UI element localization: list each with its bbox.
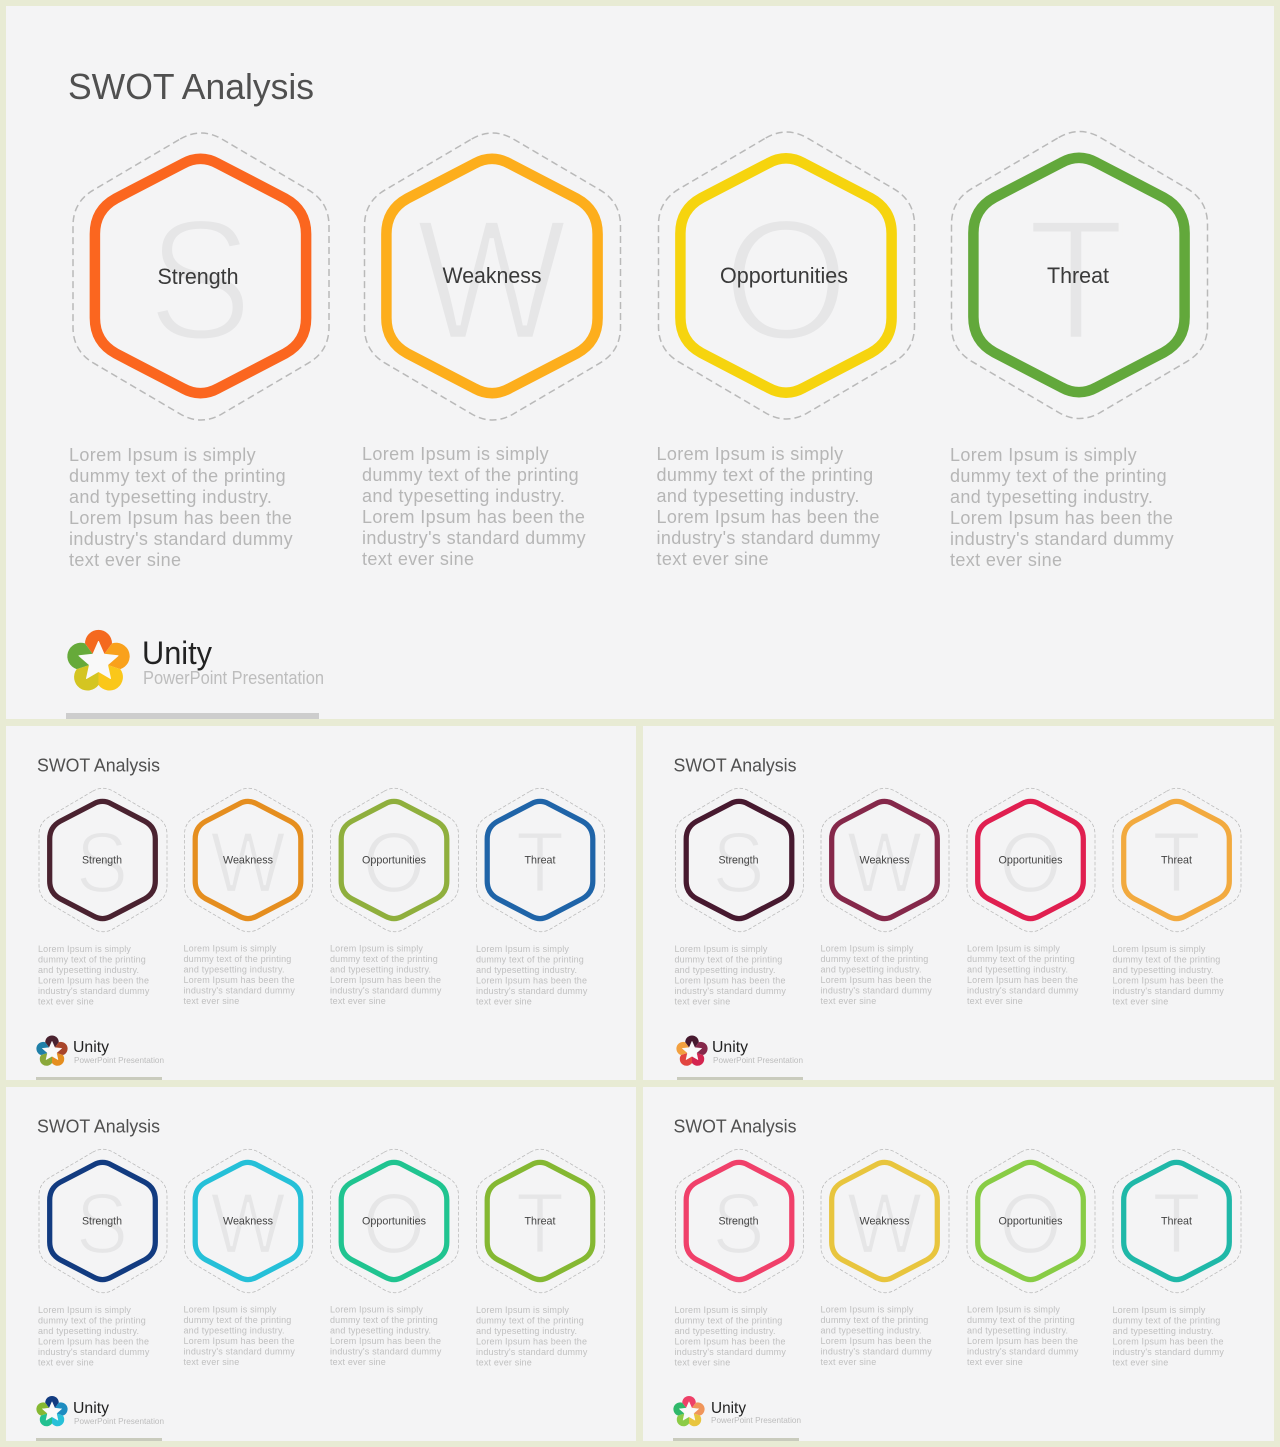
text block: Threat: Lorem Ipsum has been the <box>1112 1336 1224 1346</box>
hexagon: Threat <box>1113 1149 1241 1293</box>
panel: main SWOT slide <box>6 6 1274 719</box>
brand name: Unity <box>712 1039 748 1056</box>
hexagon: Strength <box>676 1149 804 1293</box>
title: SWOT Analysis <box>68 66 314 107</box>
panel: pink gold green teal variant <box>643 1087 1274 1441</box>
text block: Opportunities: text ever sine <box>967 1357 1023 1367</box>
text block: Strength: industry's standard dummy <box>69 529 293 549</box>
hexagon: Weakness <box>184 788 312 932</box>
hexagon: Weakness <box>184 1149 312 1293</box>
hexagon: Opportunities <box>967 788 1095 932</box>
text block: Opportunities: dummy text of the printing <box>656 465 873 485</box>
hexagon: Weakness: Weakness <box>860 1216 910 1228</box>
text block: Weakness: Lorem Ipsum is simply <box>820 944 914 954</box>
text block: Threat: Lorem Ipsum is simply <box>1112 944 1206 954</box>
text block: Threat: text ever sine <box>1112 996 1168 1006</box>
text block: Strength: dummy text of the printing <box>38 1316 146 1326</box>
hexagon: Opportunities: Opportunities <box>362 1216 426 1228</box>
panel: navy cyan teal lime variant <box>6 1087 636 1441</box>
brand subtitle: PowerPoint Presentation <box>74 1416 164 1426</box>
hexagon: Weakness: W <box>416 185 567 376</box>
hexagon: Opportunities: O <box>363 1175 425 1272</box>
hexagon: Threat: T <box>1152 814 1201 911</box>
hexagon: Strength: Strength <box>158 264 238 289</box>
text block: Threat: and typesetting industry. <box>1112 965 1214 975</box>
text block: Weakness: industry's standard dummy <box>184 1346 295 1356</box>
text block: Weakness: and typesetting industry. <box>184 1326 285 1336</box>
text block: Weakness: text ever sine <box>362 549 474 569</box>
text block: Strength: text ever sine <box>69 550 181 570</box>
text block: Threat: dummy text of the printing <box>476 954 584 964</box>
panel: maroon orange green blue variant <box>6 726 636 1080</box>
text block: Opportunities: and typesetting industry. <box>656 486 860 506</box>
text block: Threat: industry's standard dummy <box>1112 986 1224 996</box>
hexagon: Opportunities: O <box>999 814 1062 911</box>
text block: Opportunities: industry's standard dummy <box>330 986 442 996</box>
text block: Opportunities: text ever sine <box>330 996 386 1006</box>
hexagon: Strength: S <box>148 183 252 376</box>
text block: Weakness: dummy text of the printing <box>184 1315 291 1325</box>
text block: Opportunities: and typesetting industry. <box>330 1326 431 1336</box>
hexagon: Strength: Strength <box>718 1216 758 1228</box>
hexagon: Weakness <box>821 1149 949 1293</box>
text block: Opportunities: Lorem Ipsum is simply <box>656 444 844 464</box>
text block: Opportunities: text ever sine <box>330 1357 386 1367</box>
text block: Strength: Lorem Ipsum has been the <box>38 976 149 986</box>
text block: Threat: text ever sine <box>476 996 532 1006</box>
text block: Weakness: text ever sine <box>820 1357 876 1367</box>
hexagon: Threat: T <box>516 1175 564 1272</box>
text block: Strength: Lorem Ipsum has been the <box>674 976 786 986</box>
text block: Threat: text ever sine <box>950 550 1062 570</box>
title: SWOT Analysis <box>674 756 796 776</box>
brand subtitle: PowerPoint Presentation <box>713 1055 803 1065</box>
text block: Weakness: industry's standard dummy <box>820 986 932 996</box>
brand subtitle: PowerPoint Presentation <box>711 1415 801 1425</box>
text block: Weakness: Lorem Ipsum is simply <box>184 944 277 954</box>
text block: Strength: Lorem Ipsum is simply <box>674 944 768 954</box>
hexagon: Threat: Threat <box>524 854 556 866</box>
text block: Threat: Lorem Ipsum has been the <box>476 976 587 986</box>
text block: Opportunities: dummy text of the printing <box>330 1315 438 1325</box>
hexagon: Threat <box>1113 788 1241 932</box>
icon: Unity logo <box>35 1396 69 1429</box>
text block: Strength: Lorem Ipsum has been the <box>69 508 292 528</box>
text block: Opportunities: dummy text of the printing <box>330 954 438 964</box>
hexagon: Opportunities: Opportunities <box>362 854 426 866</box>
text block: Weakness: text ever sine <box>820 996 876 1006</box>
hexagon: Weakness: W <box>847 814 923 911</box>
text block: Weakness: and typesetting industry. <box>820 964 922 974</box>
text block: Weakness: dummy text of the printing <box>362 465 579 485</box>
text block: Strength: Lorem Ipsum is simply <box>69 445 256 465</box>
text block: Threat: and typesetting industry. <box>476 1326 577 1336</box>
hexagon: Opportunities: O <box>363 814 425 911</box>
text block: Threat: Lorem Ipsum is simply <box>1112 1305 1206 1315</box>
text block: Opportunities: industry's standard dummy <box>967 986 1079 996</box>
hexagon: Threat: T <box>1152 1175 1201 1272</box>
hexagon: Weakness: W <box>847 1175 923 1272</box>
hexagon: Threat: Threat <box>1161 1216 1192 1228</box>
text block: Threat: dummy text of the printing <box>1112 1316 1220 1326</box>
hexagon: Weakness: W <box>210 1175 286 1272</box>
text block: Weakness: Lorem Ipsum has been the <box>820 1336 932 1346</box>
hexagon: Threat: T <box>1028 184 1124 376</box>
icon: Unity logo <box>672 1396 706 1429</box>
footer bar <box>36 1077 162 1080</box>
text block: Opportunities: text ever sine <box>656 549 769 569</box>
text block: Strength: and typesetting industry. <box>38 965 139 975</box>
brand name: Unity <box>73 1039 109 1056</box>
text block: Opportunities: dummy text of the printing <box>967 954 1075 964</box>
hexagon: Opportunities: O <box>723 184 849 376</box>
brand subtitle: PowerPoint Presentation <box>74 1055 164 1065</box>
hexagon: Strength: Strength <box>82 854 122 866</box>
text block: Weakness: industry's standard dummy <box>820 1346 932 1356</box>
text block: Threat: industry's standard dummy <box>950 529 1174 549</box>
text block: Weakness: dummy text of the printing <box>820 954 928 964</box>
brand subtitle: PowerPoint Presentation <box>143 668 324 688</box>
text block: Weakness: dummy text of the printing <box>184 954 291 964</box>
text block: Weakness: industry's standard dummy <box>362 528 586 548</box>
text block: Threat: Lorem Ipsum has been the <box>1112 976 1224 986</box>
text block: Opportunities: Lorem Ipsum is simply <box>330 944 423 954</box>
hexagon: Weakness: Weakness <box>860 854 910 866</box>
text block: Strength: industry's standard dummy <box>674 986 786 996</box>
text block: Threat: text ever sine <box>476 1358 532 1368</box>
text block: Weakness: text ever sine <box>184 996 239 1006</box>
text block: Strength: text ever sine <box>38 996 94 1006</box>
text block: Opportunities: Lorem Ipsum is simply <box>967 1304 1060 1314</box>
hexagon: Weakness: Weakness <box>442 263 542 288</box>
hexagon: Weakness <box>364 133 620 420</box>
text block: Opportunities: Lorem Ipsum has been the <box>656 507 880 527</box>
hexagon: Weakness: Weakness <box>223 1216 273 1228</box>
text block: Opportunities: Lorem Ipsum is simply <box>330 1304 423 1314</box>
brand name: Unity <box>73 1400 109 1417</box>
hexagon: Weakness: Weakness <box>223 854 273 866</box>
text block: Strength: and typesetting industry. <box>674 1326 776 1336</box>
hexagon: Strength <box>39 788 167 932</box>
footer bar <box>36 1438 162 1441</box>
footer bar <box>66 713 319 719</box>
text block: Opportunities: Lorem Ipsum has been the <box>330 1336 441 1346</box>
text block: Weakness: Lorem Ipsum has been the <box>362 507 585 527</box>
text block: Weakness: and typesetting industry. <box>184 964 285 974</box>
hexagon: Threat: Threat <box>1161 854 1192 866</box>
icon: Unity logo <box>64 630 133 696</box>
text block: Weakness: and typesetting industry. <box>820 1326 922 1336</box>
text block: Opportunities: Lorem Ipsum has been the <box>330 975 441 985</box>
hexagon: Strength: S <box>712 816 765 911</box>
footer bar <box>677 1077 803 1080</box>
text block: Strength: text ever sine <box>38 1358 94 1368</box>
text block: Strength: dummy text of the printing <box>69 466 286 486</box>
text block: Weakness: text ever sine <box>184 1357 239 1367</box>
hexagon: Strength <box>73 133 329 420</box>
text block: Threat: Lorem Ipsum is simply <box>950 445 1137 465</box>
title: SWOT Analysis <box>37 1116 160 1136</box>
text block: Strength: and typesetting industry. <box>69 487 272 507</box>
icon: Unity logo <box>675 1035 709 1068</box>
text block: Strength: Lorem Ipsum is simply <box>38 944 131 954</box>
text block: Strength: industry's standard dummy <box>38 1347 150 1357</box>
text block: Strength: industry's standard dummy <box>674 1347 786 1357</box>
text block: Threat: dummy text of the printing <box>1112 954 1220 964</box>
hexagon: Opportunities: O <box>999 1175 1062 1272</box>
text block: Weakness: Lorem Ipsum has been the <box>184 1336 295 1346</box>
text block: Weakness: Lorem Ipsum has been the <box>184 975 295 985</box>
text block: Weakness: Lorem Ipsum is simply <box>820 1304 914 1314</box>
text block: Weakness: and typesetting industry. <box>362 486 565 506</box>
hexagon: Threat: Threat <box>1047 263 1109 288</box>
hexagon: Strength: S <box>712 1177 765 1272</box>
text block: Weakness: Lorem Ipsum is simply <box>184 1304 277 1314</box>
hexagon: Opportunities: Opportunities <box>720 263 848 288</box>
hexagon: Threat <box>476 1149 604 1293</box>
text block: Threat: industry's standard dummy <box>1112 1347 1224 1357</box>
text block: Strength: Lorem Ipsum has been the <box>38 1336 149 1346</box>
text block: Opportunities: and typesetting industry. <box>967 1326 1068 1336</box>
text block: Strength: dummy text of the printing <box>38 954 146 964</box>
text block: Opportunities: industry's standard dummy <box>967 1346 1079 1356</box>
hexagon: Threat <box>952 132 1208 418</box>
hexagon: Strength: Strength <box>82 1216 122 1228</box>
text block: Threat: industry's standard dummy <box>476 1347 588 1357</box>
hexagon: Opportunities: Opportunities <box>998 1216 1063 1228</box>
text block: Threat: Lorem Ipsum is simply <box>476 1305 569 1315</box>
hexagon: Threat: T <box>516 814 564 911</box>
text block: Threat: and typesetting industry. <box>1112 1326 1214 1336</box>
text block: Opportunities: industry's standard dummy <box>656 528 881 548</box>
text block: Strength: dummy text of the printing <box>674 954 782 964</box>
text block: Strength: industry's standard dummy <box>38 986 150 996</box>
panel: plum crimson amber variant <box>643 726 1274 1080</box>
brand name: Unity <box>142 635 212 671</box>
text block: Opportunities: Lorem Ipsum has been the <box>967 975 1078 985</box>
icon: Unity logo <box>35 1035 69 1068</box>
text block: Threat: dummy text of the printing <box>476 1316 584 1326</box>
text block: Opportunities: text ever sine <box>967 996 1023 1006</box>
text block: Weakness: Lorem Ipsum has been the <box>820 975 932 985</box>
footer bar <box>673 1438 799 1441</box>
text block: Opportunities: and typesetting industry. <box>330 964 431 974</box>
text block: Strength: Lorem Ipsum has been the <box>674 1336 786 1346</box>
hexagon: Opportunities <box>967 1149 1095 1293</box>
text block: Threat: Lorem Ipsum has been the <box>950 508 1173 528</box>
text block: Weakness: dummy text of the printing <box>820 1315 928 1325</box>
hexagon: Strength <box>676 788 804 932</box>
text block: Threat: and typesetting industry. <box>950 487 1153 507</box>
text block: Opportunities: industry's standard dummy <box>330 1346 442 1356</box>
hexagon: Weakness: W <box>210 814 286 911</box>
text block: Strength: text ever sine <box>674 1358 730 1368</box>
text block: Opportunities: Lorem Ipsum has been the <box>967 1336 1078 1346</box>
hexagon: Opportunities: Opportunities <box>998 854 1063 866</box>
hexagon: Strength: S <box>76 1177 128 1272</box>
text block: Threat: Lorem Ipsum has been the <box>476 1336 587 1346</box>
text block: Opportunities: dummy text of the printing <box>967 1315 1075 1325</box>
hexagon: Opportunities <box>658 132 914 419</box>
hexagon: Threat <box>476 788 604 932</box>
text block: Threat: and typesetting industry. <box>476 965 577 975</box>
text block: Strength: dummy text of the printing <box>674 1316 782 1326</box>
hexagon: Threat: Threat <box>524 1216 556 1228</box>
hexagon: Strength: Strength <box>718 854 758 866</box>
hexagon: Opportunities <box>330 1149 458 1293</box>
text block: Opportunities: Lorem Ipsum is simply <box>967 944 1060 954</box>
hexagon: Strength <box>39 1149 167 1293</box>
text block: Strength: and typesetting industry. <box>38 1326 139 1336</box>
text block: Opportunities: and typesetting industry. <box>967 964 1068 974</box>
text block: Threat: Lorem Ipsum is simply <box>476 944 569 954</box>
title: SWOT Analysis <box>674 1116 796 1136</box>
text block: Strength: text ever sine <box>674 996 730 1006</box>
text block: Threat: dummy text of the printing <box>950 466 1167 486</box>
text block: Strength: Lorem Ipsum is simply <box>38 1305 131 1315</box>
text block: Threat: industry's standard dummy <box>476 986 588 996</box>
text block: Strength: and typesetting industry. <box>674 965 776 975</box>
hexagon: Opportunities <box>330 788 458 932</box>
title: SWOT Analysis <box>37 756 160 776</box>
text block: Threat: text ever sine <box>1112 1358 1168 1368</box>
hexagon: Strength: S <box>76 816 128 911</box>
hexagon: Weakness <box>821 788 949 932</box>
brand name: Unity <box>711 1400 746 1417</box>
text block: Weakness: Lorem Ipsum is simply <box>362 444 549 464</box>
text block: Strength: Lorem Ipsum is simply <box>674 1305 768 1315</box>
text block: Weakness: industry's standard dummy <box>184 986 295 996</box>
